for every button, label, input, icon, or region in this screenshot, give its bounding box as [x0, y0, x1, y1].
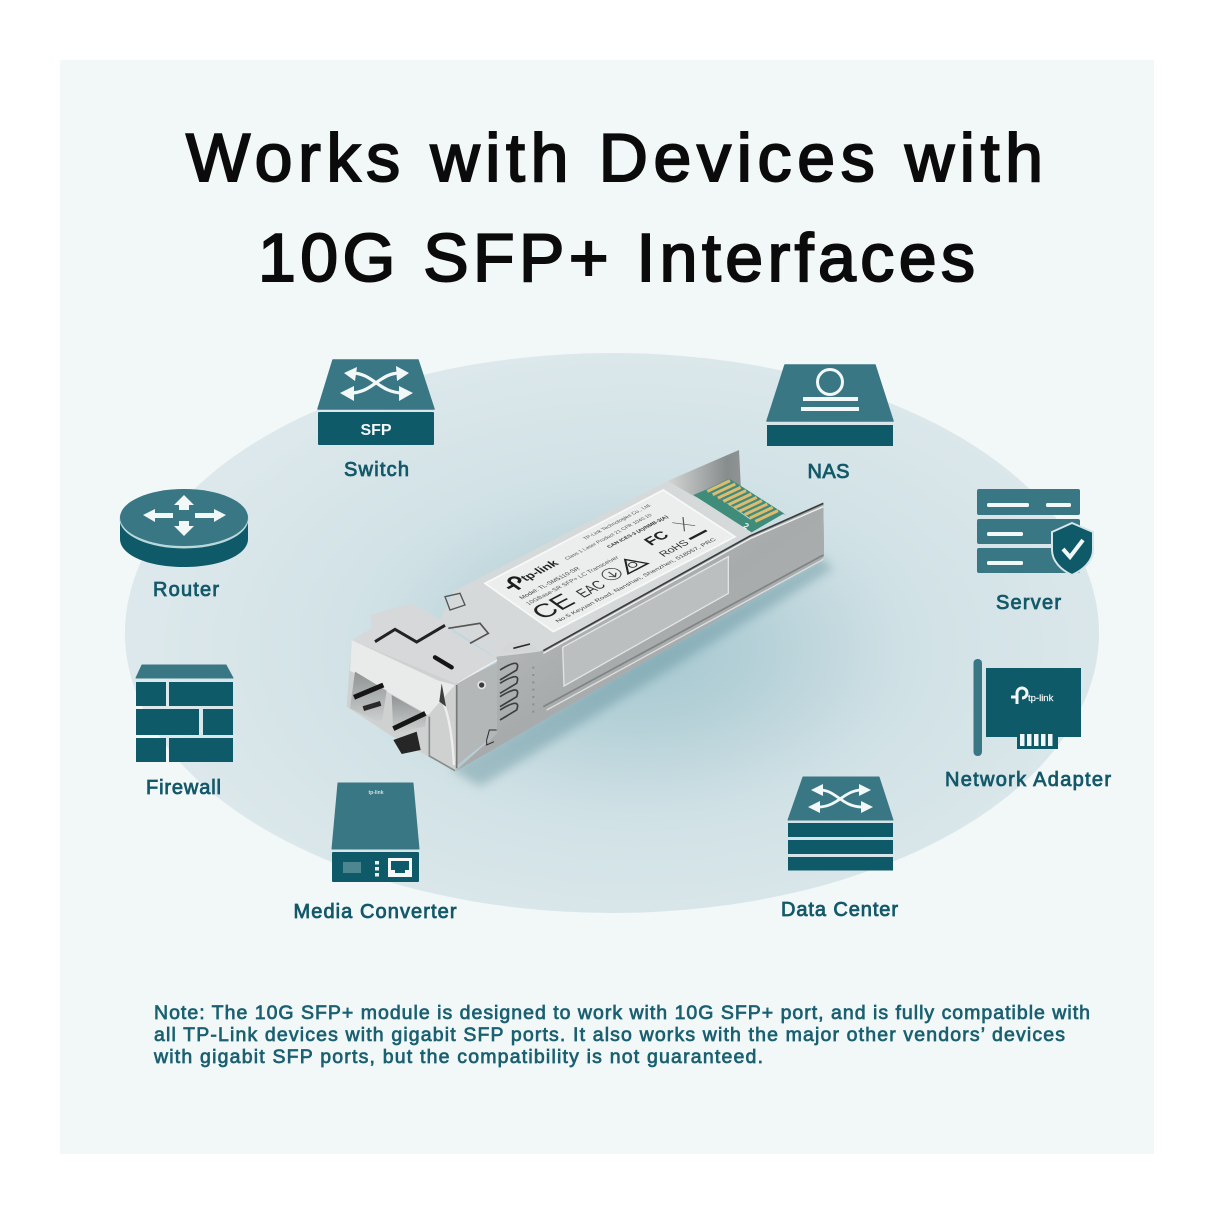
device: Firewall — [136, 665, 233, 799]
shield badge — [1052, 523, 1093, 575]
device: Media Converter: Media Converter — [294, 901, 457, 923]
product label: CAN ICES-3 (A)/NMB-3(A) — [606, 515, 670, 549]
title: 10G SFP+ Interfaces — [258, 220, 975, 296]
LC port left — [350, 672, 387, 723]
device: Network Adapter — [945, 659, 1111, 791]
device: Data Center — [781, 777, 898, 921]
SFP+ module photo — [347, 450, 833, 787]
device: Switch — [318, 360, 434, 481]
latch plate — [352, 603, 497, 683]
product label: tp-link — [517, 558, 562, 583]
compatibility note — [153, 1002, 1090, 1068]
device: Server — [977, 489, 1093, 614]
product label — [485, 490, 735, 632]
right rail — [733, 503, 824, 607]
product label: No.5 Keyuan Road, Nanshan, Shenzhen, 518057, PRC — [555, 537, 718, 624]
device: Router: Router — [153, 579, 219, 601]
product label: FC — [641, 529, 673, 548]
product label: TP-Link Technologies Co., Ltd. — [582, 503, 653, 541]
device: NAS — [767, 365, 893, 483]
device: Network Adapter: Network Adapter — [945, 769, 1111, 791]
bail wire — [440, 697, 454, 765]
device: Firewall: Firewall — [146, 777, 221, 799]
LC port right — [392, 695, 427, 733]
title: Works with Devices with — [186, 120, 1043, 196]
bottom clip — [393, 732, 421, 754]
tp-link logo — [1011, 688, 1054, 704]
product label: 10GBase-SR SFP+ LC Transceiver — [525, 555, 621, 606]
contact PCB: 2 — [742, 520, 751, 532]
device: Server: Server — [996, 592, 1061, 614]
top plate — [440, 481, 753, 658]
device: Switch: SFP — [360, 422, 392, 439]
product label: EAC — [573, 578, 610, 600]
backdrop ellipse — [125, 353, 1099, 913]
product label: Class 1 Laser Product 21 CFR 1040.10 — [564, 513, 654, 561]
compatibility note: all TP-Link devices with gigabit SFP ports. It also works with the major other vendors’ devices — [154, 1024, 1065, 1046]
product label: Model: TL-SM5110-SR — [518, 566, 582, 601]
cage back wall — [667, 450, 787, 515]
device: Data Center: Data Center — [781, 899, 898, 921]
recessed side panel — [563, 557, 728, 686]
front collar — [457, 663, 497, 765]
top edge highlight — [543, 503, 823, 651]
contact PCB — [693, 479, 784, 532]
side face — [455, 503, 824, 772]
device: Switch: Switch — [344, 459, 409, 481]
spring fingers — [500, 663, 518, 720]
product label: RoHS — [657, 538, 692, 559]
tp-link logo: tp-link — [1028, 693, 1054, 704]
front face — [347, 640, 457, 771]
title — [186, 120, 1043, 296]
device: NAS: NAS — [808, 461, 850, 483]
device: Media Converter: tp-link — [368, 790, 384, 796]
module shadow — [450, 557, 833, 787]
side vent dots — [530, 667, 536, 713]
compatibility note: Note: The 10G SFP+ module is designed to work with 10G SFP+ port, and is fully compatible with — [154, 1002, 1090, 1024]
device: Media Converter — [294, 783, 457, 923]
device: Router — [120, 489, 248, 601]
product label: CE — [524, 589, 581, 623]
compatibility note: with gigabit SFP ports, but the compatibility is not guaranteed. — [153, 1046, 763, 1068]
